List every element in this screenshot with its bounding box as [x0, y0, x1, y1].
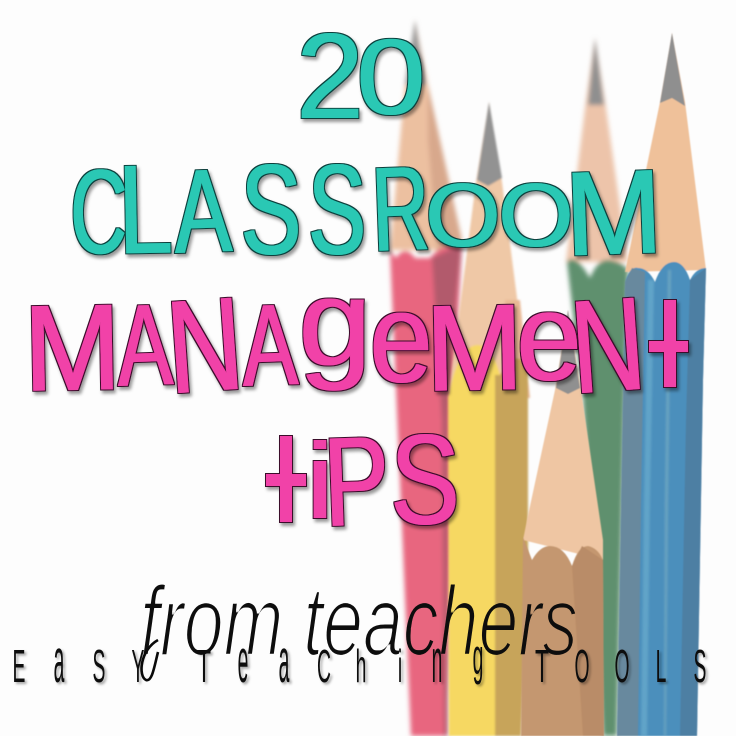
- yellow pencil: [448, 102, 530, 736]
- brand: Easy Teaching Tools: T: [197, 640, 211, 692]
- brand: Easy Teaching Tools: Y: [132, 642, 144, 692]
- brand: Easy Teaching Tools: O: [574, 642, 590, 692]
- title line: CLASSROOM: M: [563, 145, 664, 282]
- title line: CLASSROOM: O: [499, 165, 573, 265]
- red pencil: [390, 20, 462, 736]
- brand: Easy Teaching Tools: C: [317, 642, 331, 692]
- brand: Easy Teaching Tools: T: [535, 640, 549, 692]
- title line: 20: 0: [357, 16, 425, 137]
- title line: CLASSROOM: [69, 137, 664, 282]
- title line: 20: [297, 7, 425, 144]
- title line: MANAGEMENT: e: [370, 267, 432, 410]
- pencils photo: [390, 20, 706, 736]
- brand: Easy Teaching Tools: [13, 625, 706, 696]
- title line: MANAGEMENT: e: [517, 267, 581, 407]
- brand: Easy Teaching Tools: a: [54, 625, 65, 696]
- blue pencil: [617, 33, 706, 736]
- brand: Easy Teaching Tools: L: [656, 642, 666, 692]
- brand: Easy Teaching Tools: n: [432, 625, 442, 696]
- title line: CLASSROOM: C: [69, 145, 128, 280]
- title line: CLASSROOM: S: [241, 139, 301, 282]
- title line: CLASSROOM: L: [117, 137, 173, 281]
- title line: MANAGEMENT: A: [115, 280, 174, 411]
- title line: CLASSROOM: S: [308, 139, 366, 282]
- brand: Easy Teaching Tools: S: [93, 642, 105, 692]
- letter t of MANAGEMENT: t: [653, 271, 687, 414]
- brand: Easy Teaching Tools: S: [694, 642, 706, 692]
- title line: MANAGEMENT: N: [567, 268, 649, 422]
- title line: TIPS: i: [307, 422, 333, 542]
- brand: Easy Teaching Tools: e: [238, 625, 248, 696]
- title line: CLASSROOM: A: [172, 143, 233, 278]
- green pencil: [566, 38, 628, 736]
- title line: MANAGEMENT: [30, 296, 693, 399]
- title line: TIPS: [265, 433, 461, 532]
- title line: CLASSROOM: R: [370, 141, 431, 277]
- brand: Easy Teaching Tools: a: [279, 625, 290, 696]
- title line: MANAGEMENT: g: [299, 253, 371, 391]
- brand: Easy Teaching Tools: h: [356, 642, 366, 692]
- letter t of TIPS: t: [269, 406, 303, 549]
- brand: Easy Teaching Tools: E: [13, 642, 25, 692]
- letter t of MANAGEMENT: [648, 299, 693, 393]
- title line: MANAGEMENT: M: [23, 279, 122, 418]
- subtitle: from teachers: from teachers: [140, 566, 578, 676]
- title line: CLASSROOM: O: [426, 165, 500, 265]
- title line: TIPS: S: [391, 408, 459, 552]
- title line: TIPS: P: [322, 409, 391, 553]
- brand: Easy Teaching Tools: i: [398, 642, 402, 692]
- brand: Easy Teaching Tools: O: [614, 642, 630, 692]
- front wood pencil: [521, 310, 604, 736]
- title line: MANAGEMENT: N: [163, 269, 247, 423]
- brand: Easy Teaching Tools: g: [473, 629, 483, 686]
- title line: MANAGEMENT: A: [240, 280, 299, 411]
- letter t of TIPS: [265, 435, 311, 528]
- title line: MANAGEMENT: M: [425, 279, 524, 418]
- title line: 20: 2: [297, 7, 363, 144]
